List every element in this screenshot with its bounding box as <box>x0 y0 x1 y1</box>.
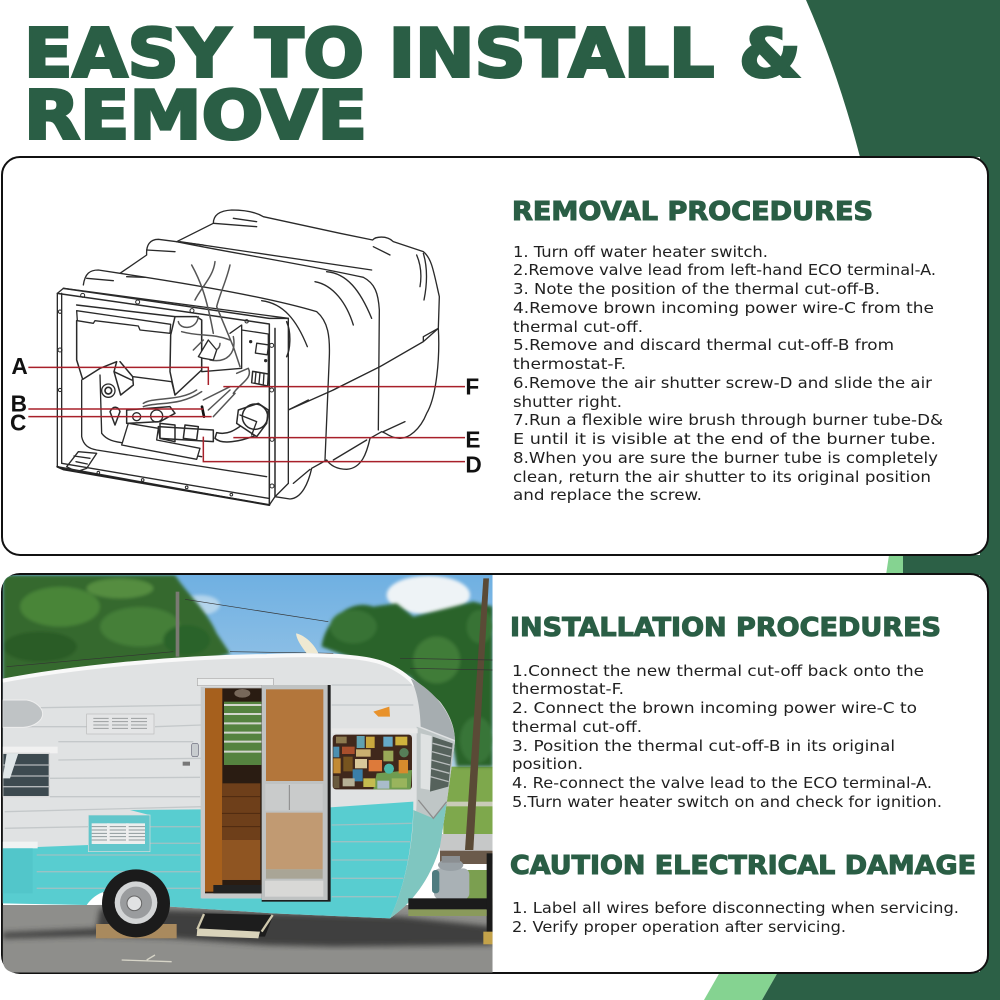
left oval badge <box>3 700 43 727</box>
door awning <box>197 678 273 686</box>
diagram: water heater with labelled parts <box>10 210 482 505</box>
front jalousie windows <box>421 733 453 792</box>
part letters <box>10 353 482 478</box>
propane tank <box>432 856 469 899</box>
text block: installation steps: 1.Connect the new thermal cut-off back onto the <box>512 662 924 680</box>
text block: removal steps: 4.Remove brown incoming power wire-C from the <box>513 299 934 317</box>
text block: removal steps: 1. Turn off water heater switch. <box>513 243 768 261</box>
surfboard on roof <box>296 633 318 653</box>
text block: installation steps <box>512 662 942 811</box>
background: dark green corner shape <box>806 0 1000 157</box>
trailer roof highlight <box>3 655 415 685</box>
text block: removal steps: thermostat-F. <box>513 355 626 373</box>
left window <box>3 747 58 797</box>
trees right <box>322 602 493 767</box>
text block: installation steps: 5.Turn water heater switch on and check for ignition. <box>512 793 942 811</box>
photo: vintage travel trailer <box>3 575 493 973</box>
background: right edge band <box>980 150 1000 980</box>
wheel blocks <box>96 924 177 938</box>
part letters: A <box>11 353 28 379</box>
trailer front lower <box>390 727 455 918</box>
left lower hatch <box>3 842 38 893</box>
text block: caution notes: 1. Label all wires before disconnecting when servicing. <box>512 899 959 917</box>
text block: installation steps: 2. Connect the brown incoming power wire-C to <box>512 699 917 717</box>
wheel well <box>103 892 104 895</box>
door opening <box>201 687 263 898</box>
amber marker light <box>373 707 390 717</box>
sky <box>3 575 493 775</box>
part letters: E <box>465 426 480 452</box>
heading: installation procedures: INSTALLATION PROCEDURES <box>510 613 941 643</box>
part letters: B <box>11 390 27 416</box>
text block: caution notes: 2. Verify proper operation after servicing. <box>512 918 846 936</box>
entry step <box>197 913 273 938</box>
siding lines <box>5 685 413 897</box>
trailer front curved section <box>411 678 455 740</box>
cloud <box>180 576 470 615</box>
upper vent <box>87 714 154 734</box>
trailer body <box>3 655 455 918</box>
title: EASY TO INSTALL & <box>24 14 801 92</box>
door handle <box>183 743 198 766</box>
text block: removal steps: clean, return the air shutter to its original position <box>513 468 931 486</box>
text block: installation steps: position. <box>512 755 583 773</box>
text block: installation steps: 3. Position the thermal cut-off-B in its original <box>512 737 895 755</box>
part letters: C <box>10 410 26 436</box>
text block: removal steps: 6.Remove the air shutter screw-D and slide the air <box>513 374 933 392</box>
open screen door <box>262 685 331 902</box>
text block: removal steps: thermal cut-off. <box>513 318 643 336</box>
tongue frame <box>408 853 493 944</box>
panel: removal <box>2 157 988 555</box>
text block: removal steps: 2.Remove valve lead from left-hand ECO terminal-A. <box>513 261 936 279</box>
text block: installation steps: thermostat-F. <box>512 680 624 698</box>
teal lower body <box>3 802 413 918</box>
text block: removal steps: and replace the screw. <box>513 486 702 504</box>
text block: installation steps: thermal cut-off. <box>512 718 642 736</box>
text block: caution notes <box>512 899 959 936</box>
part letters: F <box>465 374 479 400</box>
wheel <box>102 869 170 937</box>
grass and road <box>440 766 492 898</box>
utility poles and wires <box>7 578 493 850</box>
text block: removal steps: shutter right. <box>513 393 622 411</box>
part letters: D <box>465 452 482 478</box>
background: bottom green strip <box>704 972 1000 1000</box>
parking marking <box>122 955 172 962</box>
text block: removal steps: 7.Run a flexible wire brush through burner tube-D& <box>513 411 943 429</box>
text block: installation steps: 4. Re-connect the valve lead to the ECO terminal-A. <box>512 774 932 792</box>
ground shadow <box>3 908 493 947</box>
trees left <box>3 575 230 683</box>
text block: removal steps: E until it is visible at the end of the burner tube. <box>513 430 936 448</box>
heading: removal procedures: REMOVAL PROCEDURES <box>512 197 873 227</box>
title <box>24 14 801 154</box>
background: gap green strip <box>886 555 1000 575</box>
heading: caution electrical damage: CAUTION ELECTRICAL DAMAGE <box>510 851 976 881</box>
panel: installation and caution <box>2 574 988 973</box>
red leader lines <box>28 367 465 462</box>
text block: removal steps: 5.Remove and discard thermal cut-off-B from <box>513 336 894 354</box>
text block: removal steps: 3. Note the position of the thermal cut-off-B. <box>513 280 880 298</box>
text block: removal steps: 8.When you are sure the burner tube is completely <box>513 449 938 467</box>
ground <box>3 905 493 973</box>
text block: removal steps <box>513 243 943 504</box>
side window with stickers <box>332 728 418 789</box>
title: REMOVE <box>24 76 367 154</box>
lower vent <box>88 815 150 852</box>
